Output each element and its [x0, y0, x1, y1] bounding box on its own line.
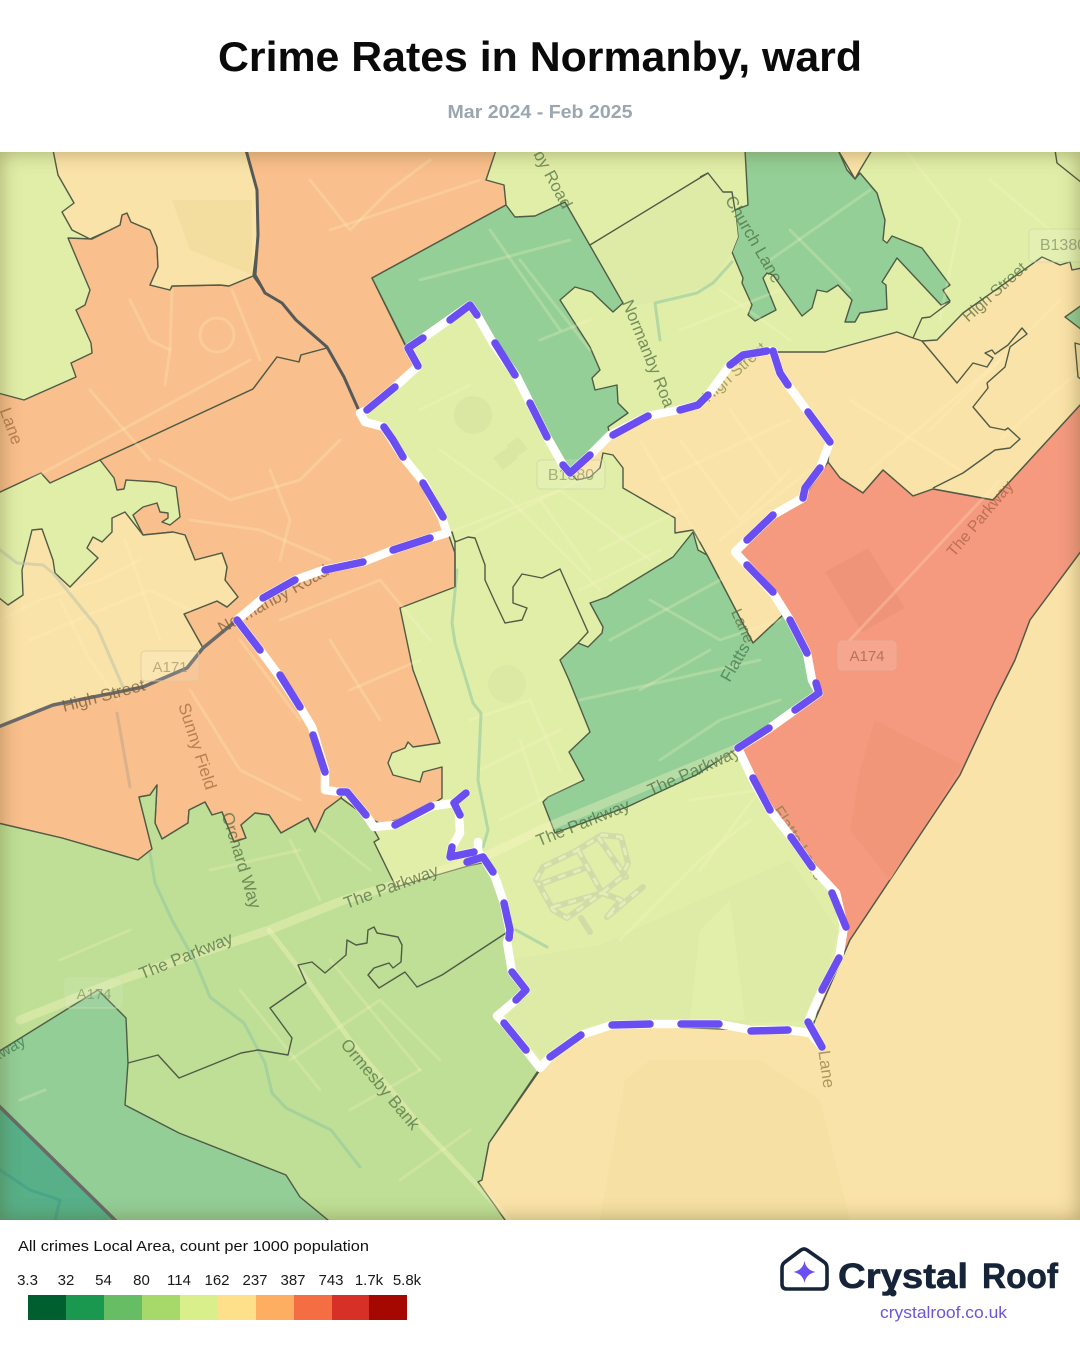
area: south-west mid green [0, 785, 540, 1230]
area: top orange [246, 150, 506, 413]
label: The Parkway 2: The Parkway [136, 928, 236, 983]
subtitle: date range: Mar 2024 - Feb 2025 [448, 102, 632, 122]
area polygons [0, 150, 1080, 1230]
legend values: 743 [318, 1272, 344, 1289]
area: south-west green [0, 990, 340, 1230]
area: ward yellow [570, 351, 830, 643]
legend values: 162 [204, 1272, 230, 1289]
label: A171 badge: A171 [152, 659, 188, 676]
ward outline purple dashes [237, 305, 846, 1057]
logo wordmark: Roof [982, 1257, 1058, 1296]
legend values: 114 [167, 1272, 191, 1289]
legend values: 1.7k [355, 1272, 384, 1289]
label: A174 badge east: A174 [849, 648, 885, 665]
label: B1380 badge centre: B1380 [548, 467, 594, 484]
logo y ring [890, 1290, 896, 1296]
logo wordmark [838, 1257, 1058, 1296]
area: west orange [0, 213, 327, 493]
label: Orchard Way: Orchard Way [218, 810, 265, 911]
pale tint patches [172, 174, 962, 1220]
legend [17, 1238, 422, 1320]
label: Lane south: Lane [814, 1049, 838, 1089]
label: The Parkway east: The Parkway [944, 478, 1017, 560]
boundary lines [128, 150, 1080, 1078]
legend title: All crimes Local Area, count per 1000 population [18, 1238, 369, 1255]
label: A171 badge [141, 651, 199, 681]
map panel [0, 152, 1080, 1220]
label: High Street west: High Street [60, 675, 147, 716]
area: north green [372, 202, 628, 473]
area: west yellow [0, 512, 238, 727]
website url: crystalroof.co.uk [880, 1304, 1008, 1322]
legend values: 387 [280, 1272, 306, 1289]
area: south-west orange [0, 348, 455, 860]
area: east edge green [1065, 305, 1080, 330]
icon: house with star [782, 1249, 827, 1289]
label: The Parkway 4: The Parkway [645, 742, 743, 800]
ward outline white [237, 305, 844, 1068]
street network [0, 150, 1080, 1220]
streams [0, 262, 732, 1220]
road labels [0, 147, 1080, 1134]
label: Sunny Field: Sunny Field [174, 701, 220, 792]
label: A174 badge west [65, 978, 122, 1008]
area: east salmon [735, 403, 1080, 1020]
area: north-east yellow [772, 257, 1080, 500]
label: Lane centre: Lane [727, 606, 757, 646]
legend values: 3.3 [17, 1272, 38, 1289]
label: B1380 badge east [1029, 229, 1080, 262]
road line south-west [0, 1105, 117, 1222]
label: Normanby Road west: Normanby Road [215, 561, 332, 638]
map edge vignette [0, 152, 1080, 1220]
title: Crime Rates in Normanby, ward [218, 33, 862, 80]
main road black line north [246, 150, 360, 413]
label: Normanby Road: Normanby Road [618, 297, 682, 419]
logo wordmark: Crystal [838, 1257, 968, 1296]
label: Ormesby Bank: Ormesby Bank [337, 1035, 424, 1134]
label: Lane south-east: Flatts Lane [768, 802, 829, 884]
label: High Street at ward: High Street [700, 339, 771, 406]
High Street road line [0, 620, 237, 727]
area: north-east green [732, 150, 950, 322]
area: small top yellow [838, 150, 872, 179]
area: north-west yellow [53, 150, 258, 290]
legend values: 80 [133, 1272, 150, 1289]
legend values: 32 [58, 1272, 74, 1289]
label: Church Lane: Church Lane [721, 192, 786, 286]
label: A174 badge west: A174 [76, 986, 112, 1003]
label: B1380 badge centre [537, 460, 605, 489]
label: The Parkway 1: The Parkway [341, 861, 441, 913]
label: High Street NE: High Street [960, 259, 1031, 326]
legend values [17, 1272, 422, 1289]
estate with dashed paths [536, 835, 643, 932]
area: far corner green [0, 1105, 117, 1230]
legend values: 5.8k [393, 1272, 422, 1289]
label: A174 badge east [838, 641, 896, 670]
legend values: 237 [242, 1272, 268, 1289]
legend values: 54 [95, 1272, 112, 1289]
legend colour scale [28, 1295, 407, 1320]
ward boundary [237, 305, 846, 1068]
logo: Crystal Roof [782, 1249, 1058, 1322]
label: Flatts: Flatts [717, 640, 754, 685]
label: The Parkway 3: The Parkway [533, 795, 633, 850]
area: centre green [543, 532, 819, 833]
area: south yellow [478, 550, 1080, 1230]
